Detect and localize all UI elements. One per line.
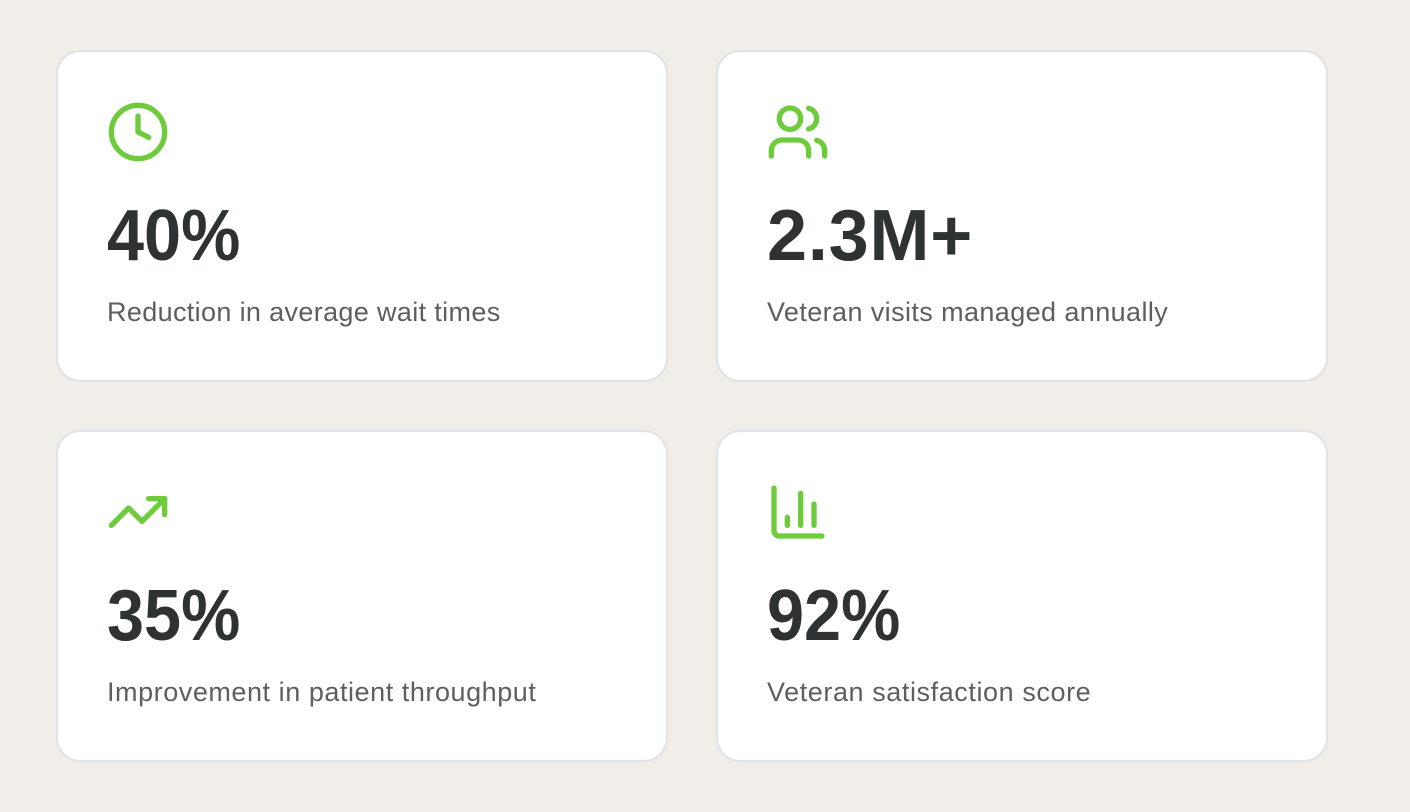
label: satisfaction: Veteran satisfaction score [767, 677, 1091, 707]
icon: users [768, 105, 828, 159]
icon: clock [108, 102, 168, 162]
label: veteran visits: Veteran visits managed annually [767, 297, 1168, 327]
panel: veteran visits metric [716, 50, 1328, 382]
icon: bar chart [771, 485, 825, 539]
stat: 92%: 92% [767, 576, 900, 656]
stat: 2.3M+: 2.3M+ [767, 196, 973, 276]
panel: patient throughput metric [56, 430, 668, 762]
stat: 40%: 40% [107, 196, 240, 276]
stat: 35%: 35% [107, 576, 240, 656]
label: wait times: Reduction in average wait times [107, 297, 501, 327]
icon: trending up arrow [108, 496, 168, 528]
panel: wait times metric [56, 50, 668, 382]
label: patient throughput: Improvement in patient throughput [107, 677, 536, 707]
panel: satisfaction metric [716, 430, 1328, 762]
